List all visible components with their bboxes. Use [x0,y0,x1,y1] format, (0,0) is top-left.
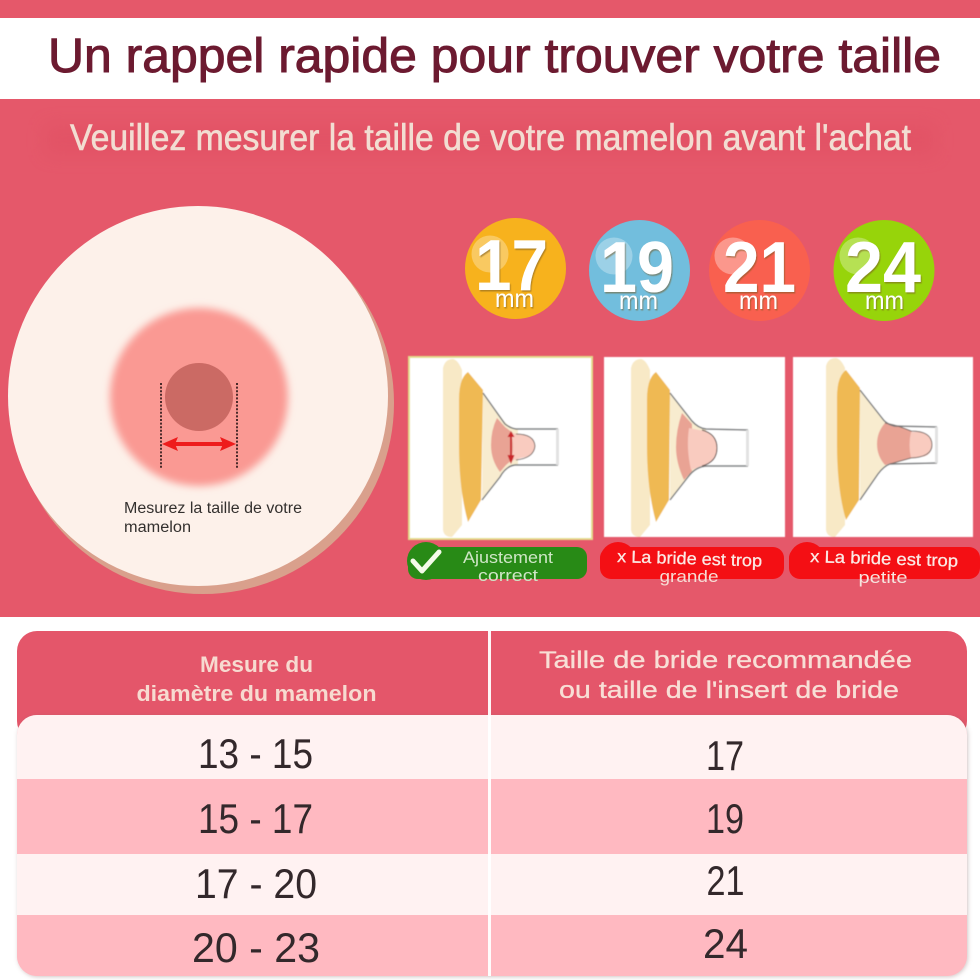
left column values: 17 - 20 [195,860,317,907]
measuring caption: Mesurez la taille de votre [124,500,302,517]
table header: diamètre du mamelon [136,681,376,706]
badge: 17 mm: mm [495,285,534,313]
left column values: 15 - 17 [198,795,313,842]
label: flange too large: grande [660,567,718,586]
label: flange too small: petite [858,568,908,587]
badge: 24 mm: 24 [845,228,921,308]
right column values: 17 [706,732,744,779]
red height arrow [508,431,514,464]
measuring caption: mamelon [124,519,191,536]
badge: 17 mm: 17 [475,226,548,306]
title banner [0,18,980,99]
left column values [192,730,320,971]
right column values: 19 [706,795,744,842]
badge: 19 mm: 19 [600,228,674,308]
panel: size table [17,631,967,976]
table header: ou taille de l'insert de bride [559,677,899,704]
right column values: 24 [703,920,748,967]
right column values: 21 [706,857,744,904]
badge: 24 mm [834,220,934,321]
left column values: 20 - 23 [192,924,320,971]
table rows [17,715,967,976]
disc shadow [12,212,394,594]
label: flange too small: x La bride est trop [810,547,958,571]
column divider [488,631,491,976]
right column values [703,732,748,967]
badge: 17 mm [465,218,566,319]
table header: Taille de bride recommandée [539,647,912,674]
subtitle: Veuillez mesurer la taille de votre mamelon avant l'achat [70,117,912,158]
measurement guides [161,383,237,468]
label: correct fit: correct [478,566,538,585]
label: flange too small [789,542,980,587]
badge: 19 mm [589,220,690,321]
badge: 24 mm: mm [865,287,904,315]
label: flange too large [600,542,784,586]
badge: 19 mm: mm [619,287,658,315]
left column values: 13 - 15 [198,730,313,777]
table header: Mesure du [200,652,313,677]
badge: 21 mm [709,220,810,321]
nipple [165,363,233,431]
table header [17,631,967,741]
label: correct fit [407,542,587,585]
panel: nipple measuring diagram [8,206,394,594]
panel: flange too small [793,357,973,537]
measuring caption [124,500,302,536]
red width arrow [162,437,236,451]
label: correct fit: Ajustement [463,548,553,567]
areola [110,308,288,486]
breast disc [8,206,388,586]
title banner: Un rappel rapide pour trouver votre taille [48,30,941,83]
table body shadow [17,715,967,976]
badge: 21 mm: 21 [723,228,796,308]
label: flange too large: x La bride est trop [617,547,762,571]
pink background band [0,0,980,617]
panel: flange too large [604,357,785,537]
badge: 21 mm: mm [739,287,778,315]
panel: correct fit flange [409,357,592,539]
